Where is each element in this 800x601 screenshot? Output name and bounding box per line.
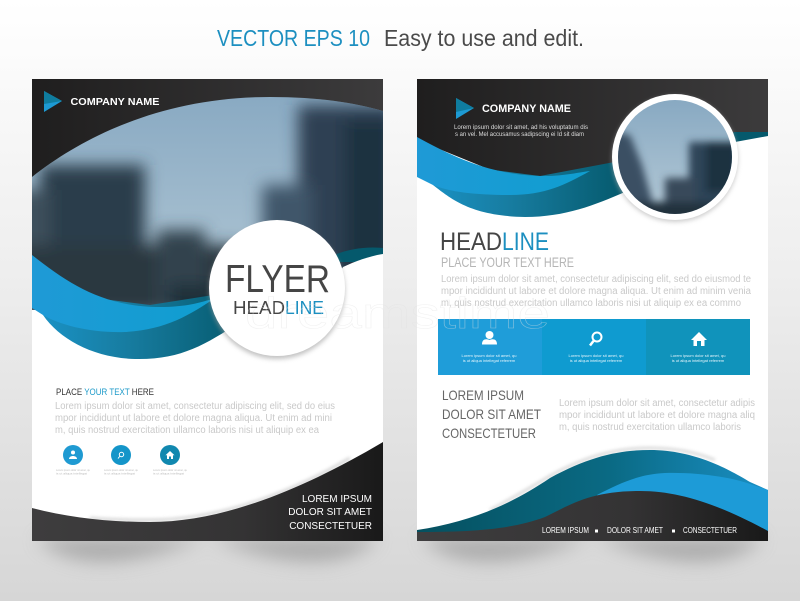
icon: magnifier: is ut aliqua intellegat	[104, 472, 135, 476]
right headline: PLACE YOUR TEXT HERE	[441, 254, 574, 270]
left icon row	[56, 445, 188, 476]
right header small text: Lorem ipsum dolor sit amet, ad his voluptatum dis	[454, 124, 589, 131]
lorem heading stack	[442, 387, 541, 441]
right body text: mpor incididunt ut labore et dolore magna aliqua. Ut enim ad minim venia	[441, 286, 751, 297]
logo: right company name: COMPANY NAME	[482, 103, 571, 115]
bottom black curve shadow	[90, 458, 350, 520]
flyer circle badge: HEAD	[233, 297, 285, 318]
header black band	[417, 79, 768, 176]
logo: left company name: COMPANY NAME	[70, 96, 160, 108]
right lower body text: mpor incididunt ut labore et dolore magna aliq	[559, 410, 755, 421]
left text block: m, quis nostrud exercitation ullamco laboris nisi ut aliquip ex ea	[55, 425, 319, 436]
right footer text: DOLOR SIT AMET	[607, 526, 663, 535]
lorem heading stack: DOLOR SIT AMET	[442, 406, 541, 422]
teal wave right of circle	[733, 132, 768, 142]
flyer circle badge	[209, 220, 345, 359]
left footer text: DOLOR SIT AMET	[288, 507, 372, 518]
icon: magnifier: Lorem ipsum dolor sit amet, qu	[104, 469, 139, 472]
left text block: mpor incididunt ut labore et dolore magna aliqua. Ut enim ad mini	[55, 413, 332, 424]
right footer text	[542, 526, 737, 535]
left footer text	[288, 494, 372, 532]
icon: house	[153, 445, 188, 476]
icon: person: is ut aliqua intellegat	[56, 472, 87, 476]
strip captions: is ut aliqua intellegat referrem	[672, 358, 725, 363]
right body text: Lorem ipsum dolor sit amet, consectetur adipiscing elit, sed do eiusmod te	[441, 274, 751, 285]
lorem heading stack: CONSECTETUER	[442, 425, 536, 441]
white body curve	[341, 254, 383, 310]
bright blue wave	[417, 137, 590, 195]
bottom black band	[32, 442, 383, 541]
left text block: PLACE YOUR TEXT HERE	[56, 387, 154, 398]
right headline	[440, 228, 574, 270]
left footer text: LOREM IPSUM	[302, 494, 372, 505]
bright blue wave	[32, 255, 215, 332]
teal wave upper right	[336, 248, 383, 262]
page shadows	[36, 538, 764, 561]
right footer text: LOREM IPSUM	[542, 526, 589, 535]
icon: house: Lorem ipsum dolor sit amet, qu	[153, 469, 188, 472]
bottom teal wave shadow	[490, 448, 715, 510]
icon strip	[438, 319, 750, 375]
flyer circle badge: FLYER	[225, 258, 330, 301]
strip captions: is ut aliqua intellegat referrem	[570, 358, 623, 363]
watermark: dreamstime	[245, 289, 550, 338]
panel: left flyer page	[10, 79, 398, 541]
icon: house: is ut aliqua intellegat	[153, 472, 184, 476]
dark teal wave	[432, 162, 624, 217]
right headline: LINE	[502, 228, 549, 256]
right body text: m, quis nostrud exercitation ullamco laboris nisi ut aliquip ex ea commo	[441, 298, 741, 309]
icon: magnifier	[590, 332, 602, 346]
top banner title: Easy to use and edit.	[384, 25, 584, 51]
bottom bright blue wave	[597, 473, 768, 535]
right header small text: s an vel. Mel accusamus sadipscing ei Id sit diam	[455, 131, 584, 138]
left text block: Lorem ipsum dolor sit amet, consectetur adipiscing elit, sed do eius	[55, 401, 335, 412]
dark teal wave	[42, 296, 225, 359]
right lower body text	[559, 398, 755, 433]
icon: person	[56, 445, 91, 476]
flyer circle badge: LINE	[285, 297, 324, 318]
top banner title: VECTOR EPS 10	[217, 25, 370, 51]
strip captions: Lorem ipsum dolor sit amet, qu	[671, 353, 725, 358]
right header small text	[454, 124, 589, 138]
bottom teal wave	[417, 450, 768, 541]
strip captions: is ut aliqua intellegat referrem	[463, 358, 516, 363]
blurred city photo	[32, 97, 383, 310]
right footer text: CONSECTETUER	[683, 526, 737, 535]
right body text	[441, 274, 751, 309]
icon: person	[482, 331, 497, 344]
icon: person: Lorem ipsum dolor sit amet, qu	[56, 469, 91, 472]
logo: right company name	[456, 98, 571, 119]
left text block	[55, 387, 335, 436]
icon: house	[691, 332, 707, 346]
left footer text: CONSECTETUER	[289, 521, 372, 532]
right header circle photo	[606, 94, 739, 225]
top banner title	[217, 25, 584, 51]
strip captions	[462, 353, 725, 363]
strip captions: Lorem ipsum dolor sit amet, qu	[462, 353, 516, 358]
icon: magnifier	[104, 445, 139, 476]
logo: left company name	[44, 91, 160, 112]
lorem heading stack: LOREM IPSUM	[442, 387, 524, 403]
right lower body text: Lorem ipsum dolor sit amet, consectetur adipis	[559, 398, 755, 409]
strip captions: Lorem ipsum dolor sit amet, qu	[569, 353, 623, 358]
right lower body text: m, quis nostrud exercitation ullamco laboris	[559, 422, 741, 433]
header black band	[32, 79, 383, 177]
right headline: HEAD	[440, 228, 502, 256]
panel: right flyer page	[417, 79, 768, 542]
bottom black wave	[417, 491, 768, 542]
